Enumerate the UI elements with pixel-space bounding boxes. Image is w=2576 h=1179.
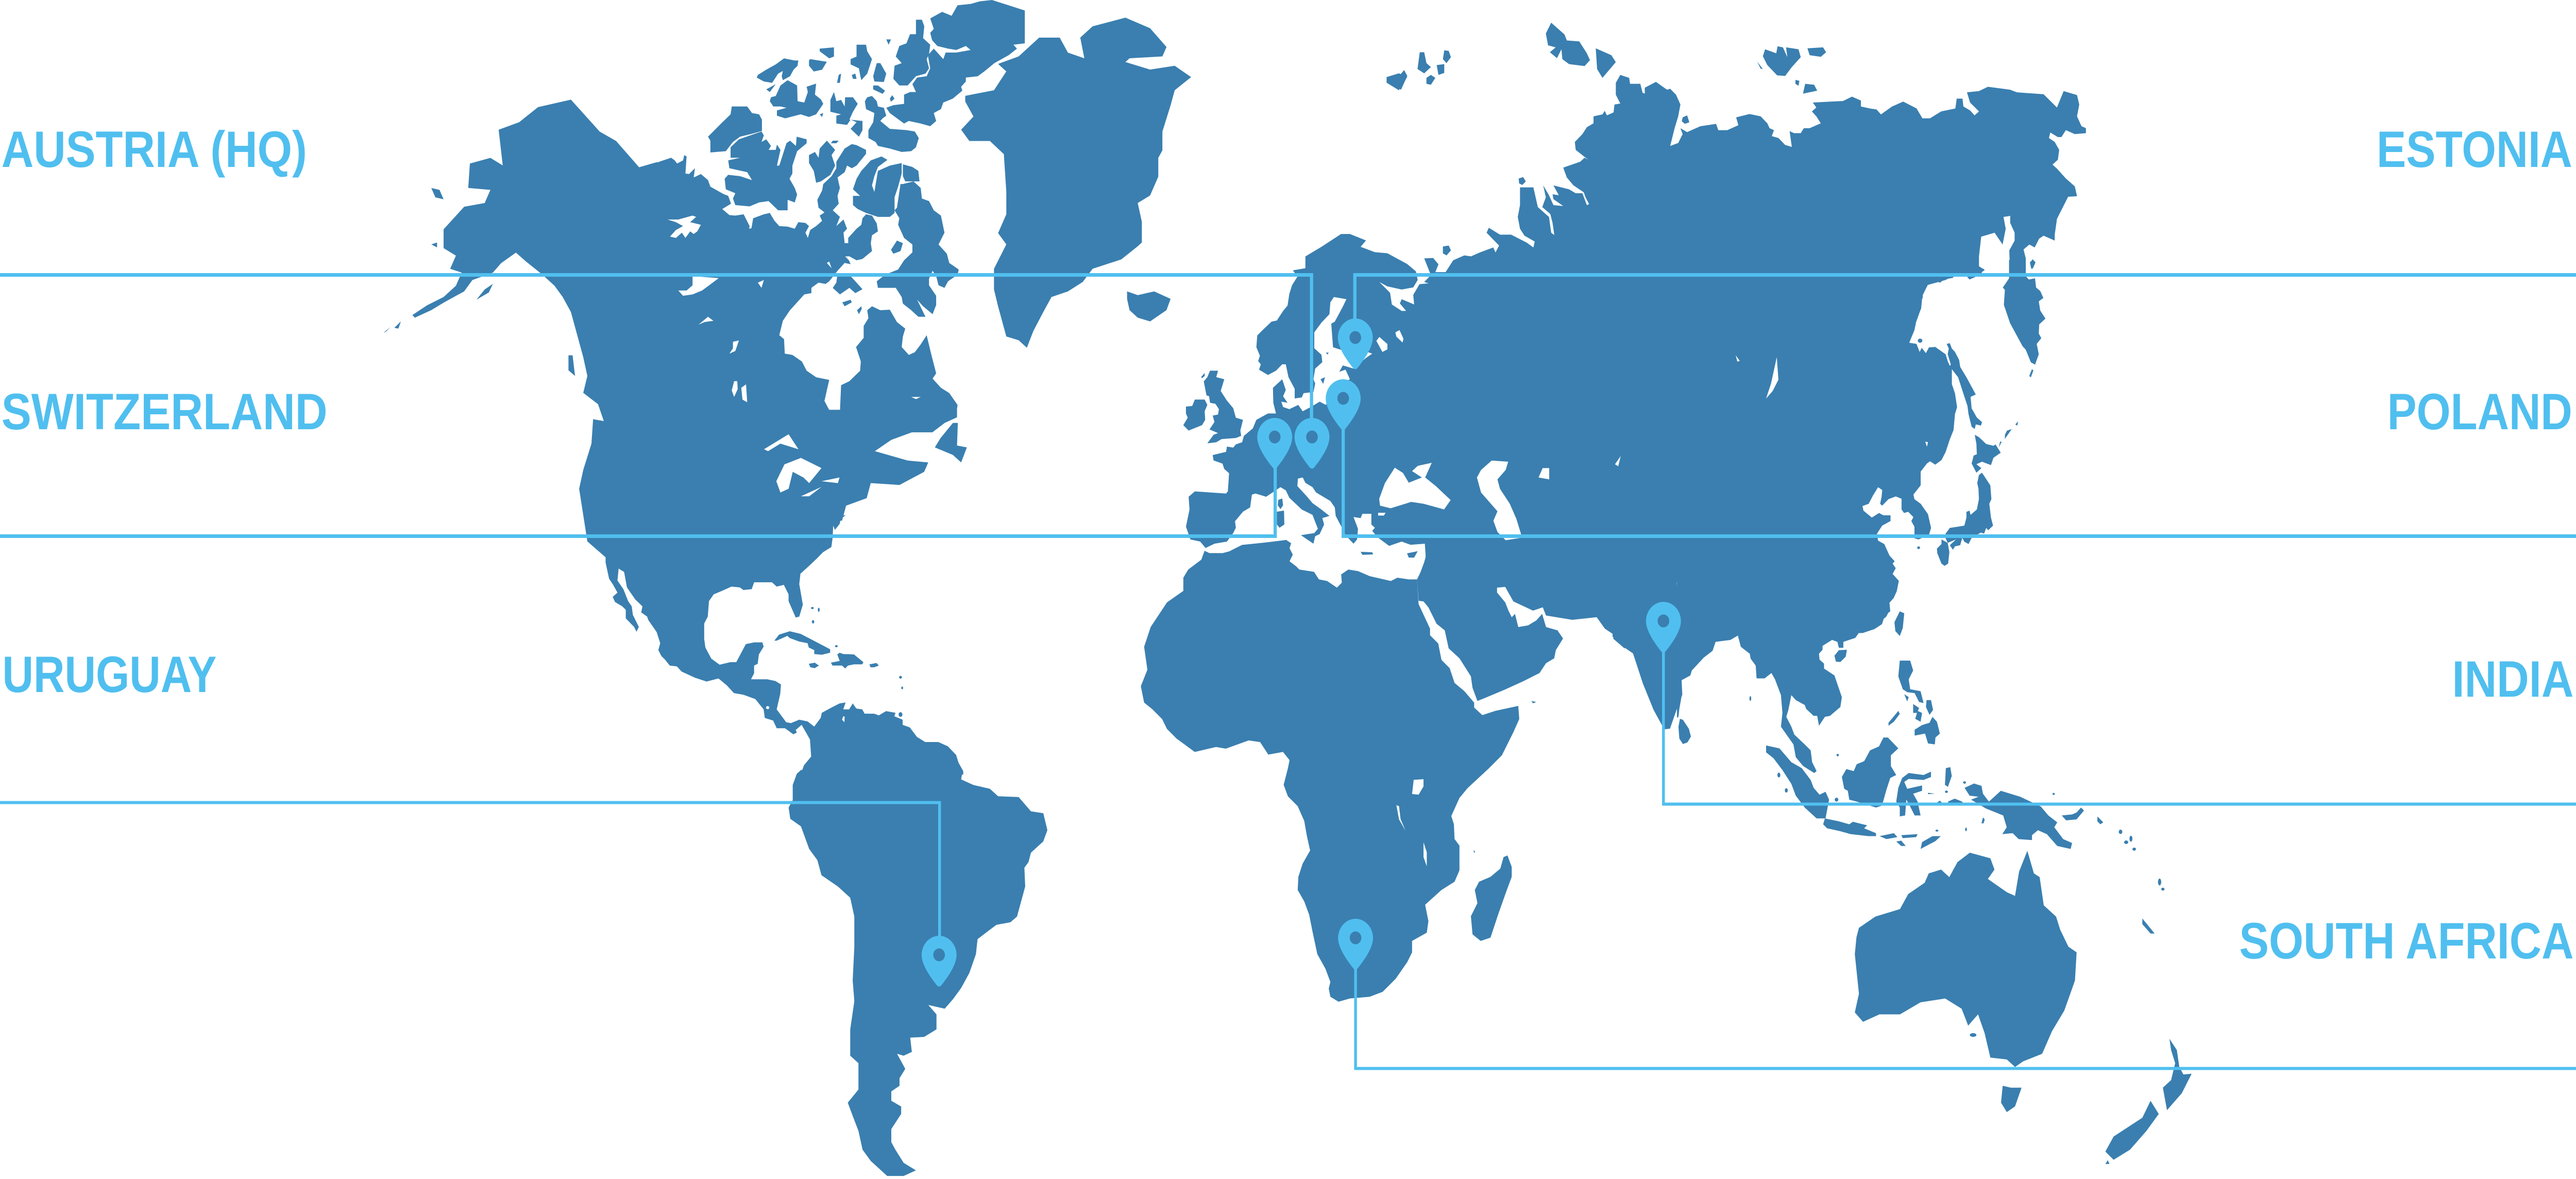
pin: Uruguay bbox=[922, 936, 957, 986]
pin: Austria bbox=[1295, 418, 1329, 469]
connector line: Estonia bbox=[1355, 275, 2576, 321]
world map bbox=[384, 0, 2192, 1176]
label: Switzerland: SWITZERLAND bbox=[2, 383, 328, 440]
lakes and inland seas bbox=[668, 40, 1928, 866]
australia and new zealand bbox=[1855, 851, 2192, 1164]
label: Estonia: ESTONIA bbox=[2377, 121, 2572, 178]
label: Austria (HQ): AUSTRIA (HQ) bbox=[2, 121, 307, 178]
pin: India bbox=[1646, 602, 1681, 652]
greenland and iceland bbox=[961, 18, 1191, 348]
africa bbox=[1141, 540, 1536, 1002]
label: India: INDIA bbox=[2452, 651, 2573, 708]
south america bbox=[789, 770, 1047, 1176]
connector line: Switzerland bbox=[0, 466, 1275, 536]
pin: Switzerland bbox=[1257, 418, 1292, 469]
north america bbox=[384, 0, 1025, 774]
connector line: Austria bbox=[0, 275, 1312, 420]
europe bbox=[1183, 234, 1444, 567]
pin: Estonia bbox=[1338, 318, 1373, 369]
label: South Africa: SOUTH AFRICA bbox=[2239, 913, 2573, 969]
pin: Poland bbox=[1326, 379, 1361, 430]
connector line: South Africa bbox=[1355, 968, 2576, 1069]
connector line: Uruguay bbox=[0, 803, 940, 938]
connector line: Poland bbox=[1343, 428, 2576, 536]
label: Uruguay: URUGUAY bbox=[3, 646, 216, 703]
asia bbox=[1386, 23, 2136, 851]
pin: South Africa bbox=[1338, 919, 1373, 970]
connector line: India bbox=[1664, 651, 2576, 804]
